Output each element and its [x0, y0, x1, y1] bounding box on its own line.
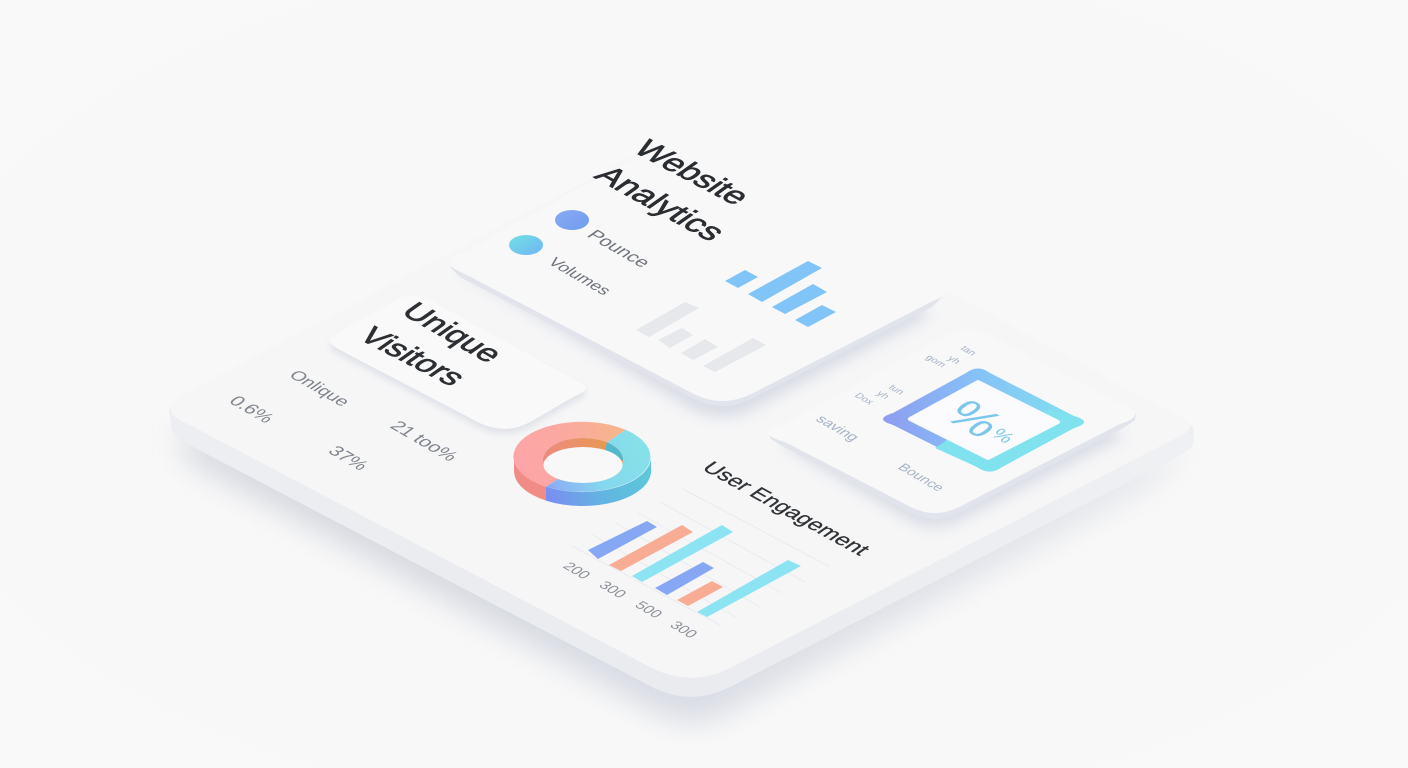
bar: cyan 1 — [632, 525, 733, 582]
bar: blue 2 — [655, 562, 714, 595]
bar: blue 1 — [588, 521, 657, 559]
stats labels: 37% — [324, 442, 374, 473]
percent card labels: tun — [886, 384, 906, 397]
platform top surface — [171, 145, 1190, 678]
donut warm segment — [513, 422, 626, 487]
percent card labels: tan — [958, 345, 978, 358]
percent card labels: yh — [874, 390, 892, 401]
heading: website analytics: Analytics — [587, 160, 734, 246]
heading: website analytics: Website — [626, 135, 758, 210]
percent card top — [768, 329, 1135, 513]
stats labels: 21 too% — [386, 417, 463, 464]
axis labels: 500 — [631, 599, 665, 621]
heading: unique visitors: Visitors — [351, 322, 474, 391]
percent card side — [769, 414, 1136, 519]
stats labels: 0.6% — [225, 392, 279, 426]
bar: orange 2 — [677, 581, 723, 606]
website analytics card top — [449, 145, 946, 401]
legend dot: bounce — [555, 210, 589, 230]
percent card labels: yh — [945, 355, 963, 366]
percent card labels: Dox — [852, 392, 876, 407]
donut wall — [514, 457, 546, 501]
unique visitors card — [330, 296, 586, 429]
heading: unique visitors: Unique — [394, 297, 511, 368]
heading: website analytics — [587, 135, 758, 246]
bar: cyan 2 — [697, 560, 801, 617]
heading: user engagement: User Engagement — [697, 458, 876, 559]
percent card labels — [812, 345, 978, 493]
stats labels: Onlique — [285, 367, 355, 409]
donut cool segment — [546, 430, 650, 492]
panel: website analytics — [449, 135, 946, 417]
website analytics card shadow — [462, 200, 932, 417]
legend labels: Volumes — [544, 255, 616, 298]
percent glyph: % — [933, 393, 1015, 445]
website analytics card side — [450, 262, 944, 406]
blue bar chart — [725, 261, 836, 327]
bar: orange 1 — [609, 525, 693, 571]
axis labels: 200 — [559, 560, 593, 582]
axis labels — [559, 560, 700, 641]
stats labels — [225, 367, 463, 473]
donut chart — [513, 422, 651, 506]
legend labels: Pounce — [583, 226, 656, 270]
legend dot: volumes — [509, 235, 543, 255]
platform shadow — [175, 430, 1190, 723]
percent card labels: saving — [812, 413, 862, 444]
donut hole — [543, 438, 623, 482]
heading: unique visitors — [351, 297, 511, 391]
axis labels: 300 — [595, 579, 629, 601]
legend labels — [544, 226, 656, 298]
gray bar chart — [636, 302, 766, 372]
percent card labels: Bounce — [895, 461, 948, 493]
chart grid lines — [572, 489, 830, 625]
panel: percentage card — [768, 329, 1136, 527]
percent card shadow — [782, 370, 1125, 527]
percent card labels: gom — [923, 354, 948, 369]
axis labels: 300 — [666, 619, 700, 641]
bar chart: user engagement — [559, 489, 830, 641]
platform base panel — [169, 145, 1194, 723]
percent ring — [883, 368, 1084, 472]
unique visitors card shadow — [330, 306, 586, 434]
percent glyph: % — [986, 425, 1019, 447]
panel: unique visitors — [330, 296, 586, 434]
platform side — [169, 409, 1194, 697]
